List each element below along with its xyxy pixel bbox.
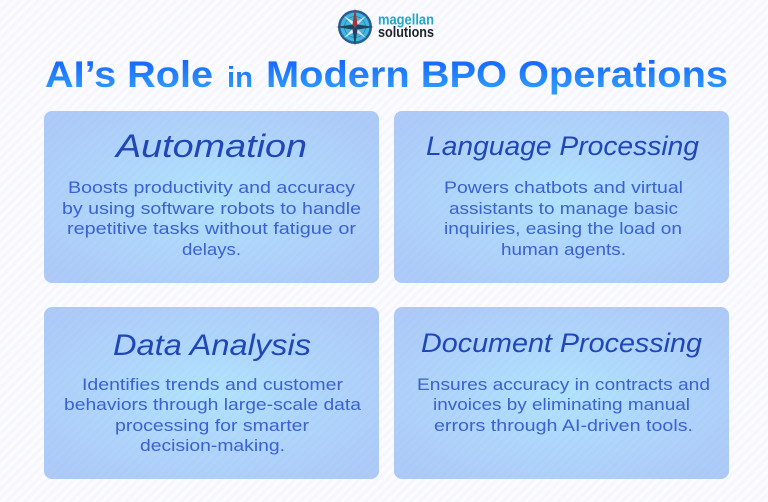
panel: language processing bbox=[394, 111, 729, 283]
text block: data analysis description bbox=[64, 376, 362, 455]
title: AI’s Role bbox=[45, 54, 213, 95]
text block: automation description: Boosts productivity and accuracy bbox=[68, 179, 356, 197]
title: Modern BPO Operations bbox=[266, 54, 728, 95]
text block: document processing description: Ensures accuracy in contracts and bbox=[417, 376, 710, 394]
title bbox=[45, 54, 728, 95]
text block: automation description: repetitive tasks without fatigue or bbox=[67, 220, 357, 238]
heading: data analysis: Data Analysis bbox=[113, 329, 311, 362]
text block: document processing description bbox=[417, 376, 710, 435]
text block: language processing description: assistants to manage basic bbox=[449, 200, 678, 218]
text block: data analysis description: behaviors through large-scale data bbox=[64, 396, 362, 414]
text block: document processing description: errors through AI-driven tools. bbox=[434, 417, 693, 435]
text block: document processing description: invoices by eliminating manual bbox=[433, 396, 690, 414]
text block: language processing description: human agents. bbox=[501, 241, 626, 259]
heading: automation: Automation bbox=[114, 128, 307, 164]
text block: data analysis description: Identifies trends and customer bbox=[82, 376, 344, 394]
text block: language processing description: Powers chatbots and virtual bbox=[444, 179, 683, 197]
text block: automation description: delays. bbox=[182, 241, 241, 259]
text block: data analysis description: decision-making. bbox=[140, 437, 285, 455]
text block: automation description: by using software robots to handle bbox=[62, 200, 361, 218]
text block: language processing description: inquiries, easing the load on bbox=[444, 220, 682, 238]
panel: data analysis bbox=[44, 307, 379, 479]
text block: data analysis description: processing for smarter bbox=[115, 417, 310, 435]
heading: document processing: Document Processing bbox=[421, 328, 702, 358]
panel: automation bbox=[44, 111, 379, 283]
heading: language processing: Language Processing bbox=[426, 131, 699, 161]
title: in bbox=[227, 62, 253, 94]
panel: document processing bbox=[394, 307, 729, 479]
text block: language processing description bbox=[444, 179, 683, 259]
text block: automation description bbox=[62, 179, 361, 259]
logo text: solutions: solutions bbox=[378, 25, 434, 41]
logo: magellan solutions bbox=[336, 8, 434, 46]
icon: compass bbox=[336, 8, 374, 46]
logo text: magellan: magellan bbox=[378, 12, 434, 28]
